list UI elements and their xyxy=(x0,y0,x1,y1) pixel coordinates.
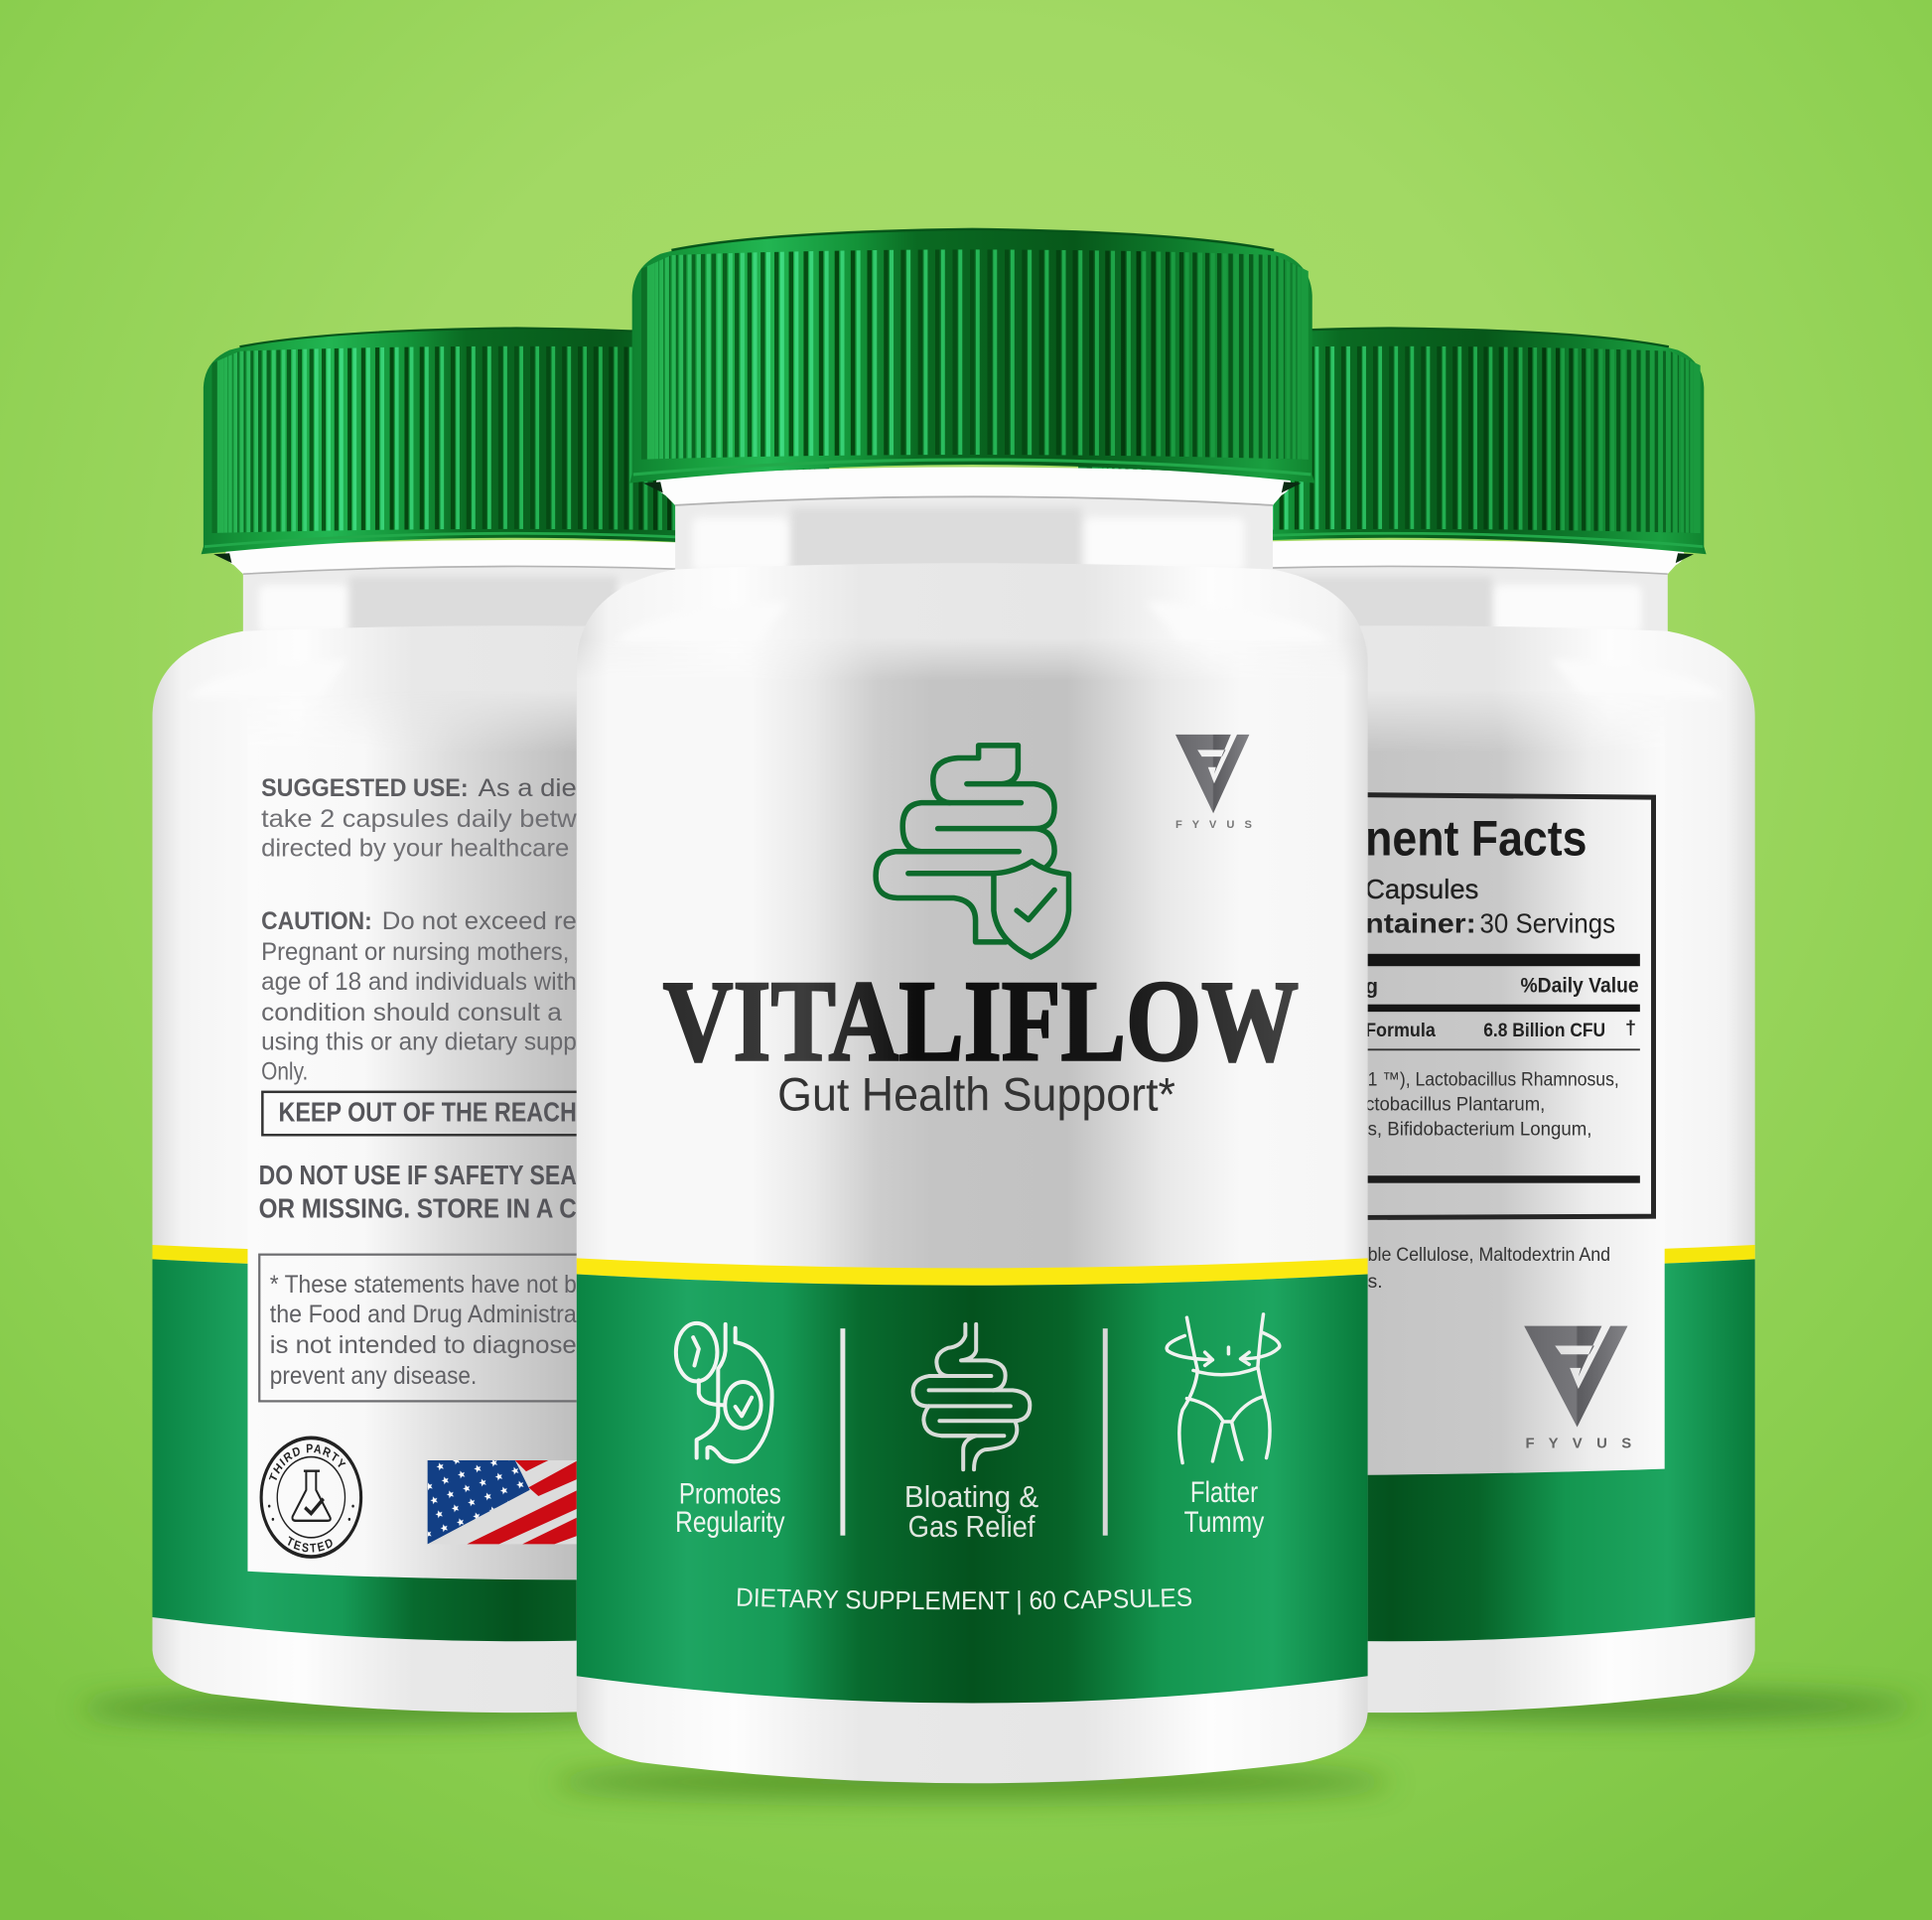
right label paper xyxy=(1355,684,1665,1475)
third party tested seal: THIRD PARTY xyxy=(268,1443,345,1480)
benefit: bloating and gas relief xyxy=(904,1324,1038,1544)
label xyxy=(904,1480,1038,1544)
keep out of reach box: KEEP OUT OF THE REACH xyxy=(278,1097,577,1128)
supplement facts panel xyxy=(1361,795,1654,1217)
ingredient list: ctobacillus Plantarum, xyxy=(1365,1094,1545,1115)
caution text: age of 18 and individuals with xyxy=(261,969,577,996)
icon: gut with shield xyxy=(876,746,1069,957)
subtitle: Gut Health Support* xyxy=(777,1067,1175,1120)
benefit: promotes regularity xyxy=(675,1323,785,1539)
center label paper xyxy=(577,638,1368,1270)
label xyxy=(1184,1476,1264,1539)
american flag xyxy=(428,1460,578,1544)
suggested use text xyxy=(261,775,577,863)
caution text: condition should consult a xyxy=(261,1000,562,1027)
label: Promotes xyxy=(679,1477,781,1510)
other ingredients: ble Cellulose, Maltodextrin And xyxy=(1368,1245,1610,1266)
label: Gas Relief xyxy=(908,1510,1035,1544)
safety seal warning xyxy=(259,1160,577,1223)
caution text: using this or any dietary supp xyxy=(261,1029,577,1056)
keep out of reach box xyxy=(262,1092,586,1135)
dietary supplement line: DIETARY SUPPLEMENT | 60 CAPSULES xyxy=(737,1588,1191,1614)
suggested use text: As a die xyxy=(479,775,577,802)
serving info: ntainer: xyxy=(1365,908,1476,939)
yellow band xyxy=(577,1258,1368,1286)
facts heading: nent Facts xyxy=(1365,810,1587,866)
label: Regularity xyxy=(675,1506,785,1539)
formula row: 6.8 Billion CFU xyxy=(1483,1020,1605,1041)
suggested use text: SUGGESTED USE: xyxy=(261,775,469,802)
icon: waist xyxy=(1167,1314,1280,1463)
icon: stomach with clock xyxy=(676,1323,772,1461)
FDA disclaimer box: prevent any disease. xyxy=(270,1363,477,1390)
caution text: Do not exceed re xyxy=(382,908,577,935)
center bottle: front label xyxy=(576,228,1368,1783)
ingredient list: 1 ™), Lactobacillus Rhamnosus, xyxy=(1368,1070,1619,1091)
safety seal warning: OR MISSING. STORE IN A C xyxy=(259,1192,577,1223)
FDA disclaimer box: is not intended to diagnose xyxy=(270,1332,577,1359)
benefit: flatter tummy xyxy=(1167,1314,1280,1539)
ingredient list: s, Bifidobacterium Longum, xyxy=(1368,1119,1591,1140)
serving info xyxy=(1365,874,1615,939)
third party tested seal xyxy=(260,1436,363,1559)
suggested use text: directed by your healthcare xyxy=(261,836,569,863)
FDA disclaimer box: * These statements have not b xyxy=(270,1272,577,1299)
right bottle body and cap xyxy=(1028,328,1755,1713)
bottle shadows xyxy=(80,1691,1916,1798)
FYVUS logo large: F Y V U S xyxy=(1525,1437,1631,1452)
FYVUS logo small: F Y V U S xyxy=(1175,819,1252,831)
formula row: Formula xyxy=(1365,1020,1437,1041)
third party tested seal: TESTED xyxy=(288,1536,333,1553)
safety seal warning: DO NOT USE IF SAFETY SEA xyxy=(259,1160,577,1190)
green label band xyxy=(577,1275,1368,1704)
formula row: † xyxy=(1625,1017,1636,1038)
serving info: Capsules xyxy=(1365,874,1478,904)
center bottle body and cap xyxy=(577,229,1368,1783)
right bottle: supplement facts xyxy=(1028,328,1755,1713)
caution text: Only. xyxy=(261,1058,308,1085)
left label paper xyxy=(247,684,579,1579)
ingredient list xyxy=(1365,1070,1619,1140)
FDA disclaimer box xyxy=(259,1255,585,1401)
label xyxy=(675,1477,785,1539)
serving info: 30 Servings xyxy=(1480,908,1615,939)
icon: intestines xyxy=(913,1324,1030,1469)
formula row xyxy=(1365,1017,1636,1041)
left bottle body and cap xyxy=(152,328,881,1713)
daily value header: %Daily Value xyxy=(1520,974,1639,997)
caution text xyxy=(261,908,577,1085)
daily value header: g xyxy=(1365,976,1378,999)
FYVUS logo large xyxy=(1524,1326,1631,1452)
FYVUS logo small xyxy=(1175,735,1252,831)
label: Tummy xyxy=(1184,1506,1264,1539)
label: Flatter xyxy=(1190,1476,1258,1509)
caution text: Pregnant or nursing mothers, xyxy=(261,939,569,966)
product title: VITALIFLOW xyxy=(663,958,1299,1086)
left bottle: back label xyxy=(153,327,830,1714)
other ingredients xyxy=(1368,1245,1610,1293)
suggested use text: take 2 capsules daily betw xyxy=(261,806,577,833)
daily value header xyxy=(1365,974,1639,999)
caution text: CAUTION: xyxy=(261,908,372,935)
FDA disclaimer box: the Food and Drug Administra xyxy=(270,1302,577,1328)
other ingredients: s. xyxy=(1368,1272,1383,1293)
label: Bloating & xyxy=(904,1480,1038,1514)
